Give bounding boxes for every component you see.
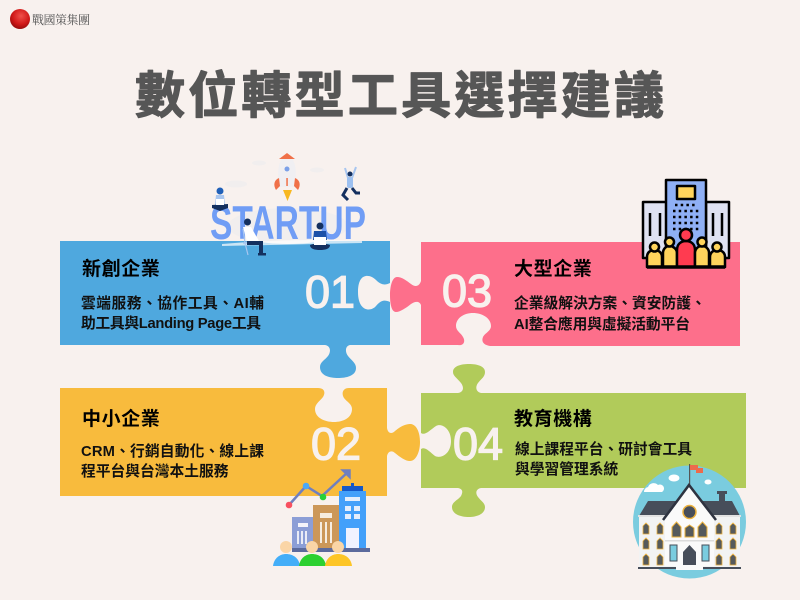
icon: enterprise building and people: [643, 180, 729, 267]
STARTUP lettering: STARTUP: [210, 196, 366, 249]
person: cross-legged: [310, 222, 330, 250]
icon: school building: [633, 464, 746, 578]
body text: 雲端服務、協作工具、AI輔: [81, 294, 264, 312]
puzzle piece 03 pink: [390, 242, 740, 346]
body text: 線上課程平台、研討會工具: [515, 440, 692, 458]
puzzle piece 01 blue: [60, 241, 390, 378]
logo: 戰國策集團: [32, 12, 90, 27]
body text: 企業級解決方案、資安防護、: [514, 294, 706, 312]
body text: 助工具與Landing Page工具: [81, 315, 261, 332]
person: jumping: [343, 167, 360, 200]
heading: 新創企業: 新創企業: [82, 257, 160, 280]
puzzle piece 02 yellow: [60, 388, 420, 496]
person: on chair: [243, 218, 266, 256]
heading: 教育機構: 教育機構: [514, 407, 592, 430]
number 02: 02: [311, 418, 361, 470]
number 04: 04: [453, 418, 503, 470]
title: 數位轉型工具選擇建議: [135, 68, 664, 124]
puzzle piece 04 green: [421, 364, 746, 517]
rocket: [274, 153, 300, 201]
heading: 中小企業: 中小企業: [82, 407, 160, 430]
body text: [81, 442, 264, 480]
logo: [10, 9, 90, 29]
body text: [515, 440, 692, 478]
number 03: 03: [442, 266, 492, 316]
body text: 與學習管理系統: [515, 460, 618, 478]
body text: CRM、行銷自動化、線上課: [81, 442, 264, 460]
body text: [81, 294, 264, 332]
body text: [514, 294, 706, 333]
person: left sitting: [212, 188, 228, 211]
body text: 程平台與台灣本土服務: [81, 462, 229, 480]
number 01: 01: [305, 266, 355, 318]
heading: 大型企業: 大型企業: [514, 257, 592, 280]
body text: AI整合應用與虛擬活動平台: [514, 315, 690, 333]
icon: SME buildings, growth chart and people: [273, 470, 370, 566]
icon: startup illustration: [210, 153, 366, 256]
